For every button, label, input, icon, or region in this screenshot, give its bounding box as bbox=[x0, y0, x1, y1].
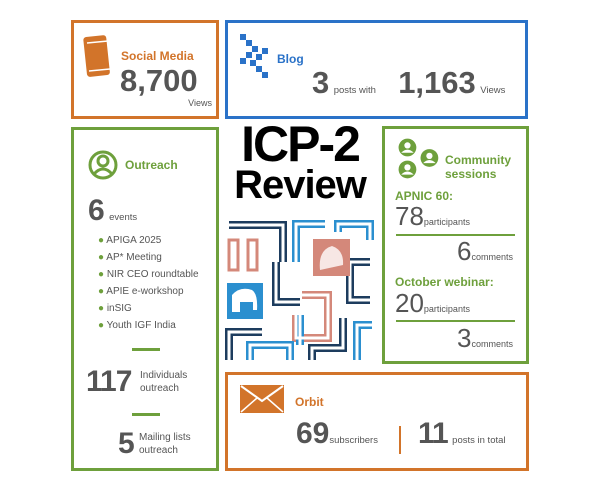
stat: 3 comments: 3comments bbox=[457, 323, 513, 353]
panel: outreach bbox=[71, 127, 219, 471]
panel: outreach: outreach bbox=[140, 383, 179, 394]
list: events: ● NIR CEO roundtable bbox=[98, 269, 199, 280]
stat: 5 mailing lists bbox=[118, 427, 191, 460]
stat: 11 posts in total: 11 posts in total bbox=[418, 417, 506, 450]
panel: outreach: Individuals bbox=[140, 370, 187, 381]
list: events: ● inSIG bbox=[98, 303, 132, 314]
list: events: ● AP* Meeting bbox=[98, 252, 162, 263]
icon: three people bbox=[398, 138, 438, 178]
logo: maze bbox=[225, 220, 374, 360]
stat: 20 participants: 20participants bbox=[395, 288, 470, 318]
stat: 3 posts with 1,163 views: 3 posts with 1,163 Views bbox=[312, 65, 505, 100]
heading: community sessions: Community bbox=[445, 153, 511, 167]
list: events: ● Youth IGF India bbox=[98, 320, 176, 331]
stat: 8,700 views: 8,700 bbox=[120, 63, 198, 98]
heading: orbit: Orbit bbox=[295, 395, 324, 409]
icon: person circle bbox=[88, 150, 118, 180]
icon: phone bbox=[83, 35, 110, 77]
title: ICP-2 Review bbox=[234, 116, 367, 207]
stat: 78 participants: 78participants bbox=[395, 201, 470, 231]
list: events bbox=[98, 235, 199, 331]
heading: blog: Blog bbox=[277, 52, 304, 66]
heading: social media: Social Media bbox=[121, 49, 194, 63]
panel: orbit bbox=[225, 372, 529, 471]
icon: blog pixel arrows bbox=[240, 34, 268, 78]
stat: 117 individuals: 117 bbox=[86, 365, 131, 398]
panel: outreach: Mailing lists bbox=[139, 432, 191, 443]
icon: envelope bbox=[240, 385, 284, 413]
panel: community sessions bbox=[382, 126, 529, 364]
subheading: APNIC 60: APNIC 60: bbox=[395, 189, 453, 203]
title: ICP-2 Review: Review bbox=[234, 163, 366, 207]
stat: 5 mailing lists: 5 bbox=[118, 427, 135, 460]
stat: 117 individuals bbox=[86, 365, 187, 398]
subheading: October webinar: October webinar: bbox=[395, 275, 494, 289]
stat: 6 events: 6 events bbox=[88, 194, 137, 227]
heading: community sessions bbox=[445, 153, 511, 181]
stat: 69 subscribers: 69subscribers bbox=[296, 417, 378, 450]
panel: outreach: outreach bbox=[139, 445, 178, 456]
heading: community sessions: sessions bbox=[445, 167, 496, 181]
stat: 8,700 views: Views bbox=[188, 98, 212, 108]
heading: outreach: Outreach bbox=[125, 158, 178, 172]
panel: social media bbox=[71, 20, 219, 119]
list: events: ● APIGA 2025 bbox=[98, 235, 161, 246]
panel: blog bbox=[225, 20, 528, 119]
stat: 6 comments: 6comments bbox=[457, 236, 513, 266]
list: events: ● APIE e-workshop bbox=[98, 286, 184, 297]
stat: 8,700 views bbox=[120, 63, 212, 108]
title: ICP-2 Review: ICP-2 bbox=[241, 116, 359, 172]
